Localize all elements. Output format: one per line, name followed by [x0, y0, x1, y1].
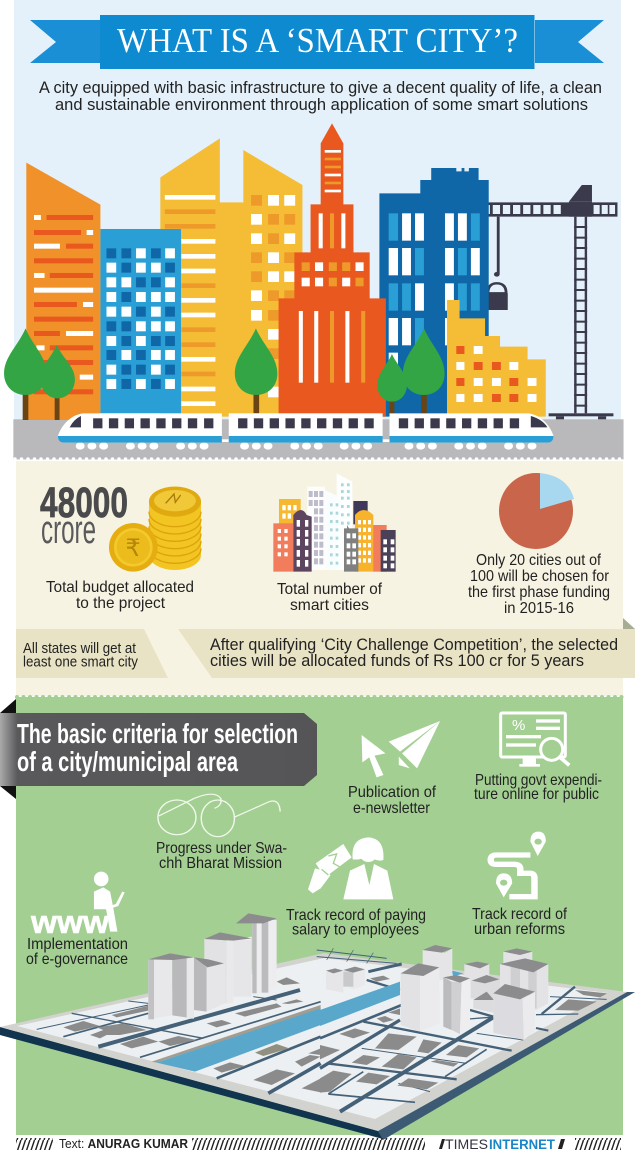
illustration: city skyline with metro train — [4, 123, 624, 459]
illustration: isometric city map — [0, 913, 635, 1140]
building: light blue block with windows — [100, 229, 181, 413]
building: dark blue tower — [379, 168, 489, 417]
label: salary record: Track record of paying — [286, 907, 426, 924]
ribbon: city challenge competition note: After qualifying ‘City Challenge Competition’, the selected — [210, 635, 618, 654]
label: e-governance: Implementation — [27, 936, 128, 953]
icon: route map with pins — [491, 832, 546, 897]
map: right half roads, blocks and towers — [317, 945, 607, 1112]
building: yellow stepped block — [447, 300, 546, 417]
pie chart: 20 of 100 cities — [499, 473, 574, 549]
ribbon: all states note: All states will get at — [23, 641, 136, 657]
label: pie chart description: the first phase funding — [468, 584, 610, 601]
label: swachh bharat: chh Bharat Mission — [159, 855, 282, 872]
label: e-newsletter — [348, 784, 437, 817]
crane — [464, 185, 617, 419]
map: left half roads, river, blocks and towers — [37, 913, 321, 1093]
label: govt expenditure — [474, 772, 602, 803]
label: pie chart description: 100 will be chosen for — [470, 568, 610, 585]
label: total number of smart cities — [277, 581, 383, 614]
label: e-governance — [26, 936, 128, 968]
icon: stacks of rupee coins — [109, 487, 201, 572]
footer credits: Text: ANURAG KUMAR — [59, 1136, 189, 1151]
stat: 48000 crore: 48000 — [40, 479, 128, 527]
label: swachh bharat: Progress under Swa- — [156, 840, 287, 857]
panel: budget and funding facts — [16, 461, 635, 696]
label: urban reforms: urban reforms — [474, 921, 565, 938]
ribbon: city challenge competition note: cities will be allocated funds of Rs 100 cr for 5 years — [210, 651, 584, 670]
label: total number of smart cities: Total number of — [277, 581, 383, 598]
label: e-newsletter: e-newsletter — [353, 800, 431, 817]
label: govt expenditure: Putting govt expendi- — [475, 772, 602, 789]
label: govt expenditure: ture online for public — [474, 786, 599, 803]
stat: 48000 crore — [40, 479, 128, 552]
label: pie chart description: Only 20 cities out of — [476, 552, 601, 569]
subtitle text: and sustainable environment through application of some smart solutions — [55, 95, 588, 114]
heading: basic criteria — [0, 699, 317, 799]
building: yellow twin tower — [160, 138, 302, 417]
building: orange block — [26, 163, 100, 420]
icon: www with person — [30, 872, 125, 940]
label: salary record: salary to employees — [292, 922, 419, 938]
ground strip — [13, 419, 624, 459]
label: urban reforms — [472, 906, 567, 938]
subtitle text: A city equipped with basic infrastructure to give a decent quality of life, a clean — [39, 78, 602, 97]
label: urban reforms: Track record of — [472, 906, 567, 923]
trees — [4, 328, 445, 420]
icon: monitor with magnifier — [501, 713, 569, 767]
label: total budget — [46, 579, 194, 612]
heading: basic criteria: of a city/municipal area — [17, 746, 238, 777]
panel: top sky background — [14, 0, 621, 460]
label: e-newsletter: Publication of — [348, 784, 437, 801]
footer credits: INTERNET — [489, 1136, 555, 1152]
ribbon: all states note: least one smart city — [23, 654, 139, 670]
heading: basic criteria: The basic criteria for selection — [17, 718, 298, 749]
icon: small city cluster — [273, 473, 396, 572]
title banner — [30, 15, 604, 69]
building: red-orange spire tower — [279, 123, 386, 417]
metro train — [58, 413, 553, 450]
panel: selection criteria — [0, 697, 635, 1140]
label: total number of smart cities: smart cities — [290, 597, 369, 614]
icon: woman with rupee note — [308, 837, 393, 899]
icon: www with person: www — [30, 904, 109, 940]
label: pie chart description — [468, 552, 610, 617]
label: total budget: Total budget allocated — [46, 579, 194, 596]
label: swachh bharat — [156, 840, 287, 872]
ribbon: all states note — [16, 629, 168, 678]
icon: percent sign: % — [512, 717, 525, 734]
icon: rupee symbol: ₹ — [126, 534, 141, 562]
ribbon: city challenge competition note — [178, 618, 635, 678]
label: total budget: to the project — [76, 595, 166, 612]
subtitle text — [39, 78, 602, 114]
label: salary record — [286, 907, 426, 938]
stat: 48000 crore: crore — [41, 508, 96, 552]
footer credits — [16, 1136, 621, 1152]
title: WHAT IS A ‘SMART CITY’? — [117, 21, 518, 60]
label: e-governance: of e-governance — [26, 951, 128, 968]
label: pie chart description: in 2015-16 — [504, 600, 574, 617]
footer credits: TIMES — [445, 1136, 488, 1152]
icon: cursor and paper plane — [362, 721, 440, 777]
icon: spectacles — [158, 794, 280, 837]
